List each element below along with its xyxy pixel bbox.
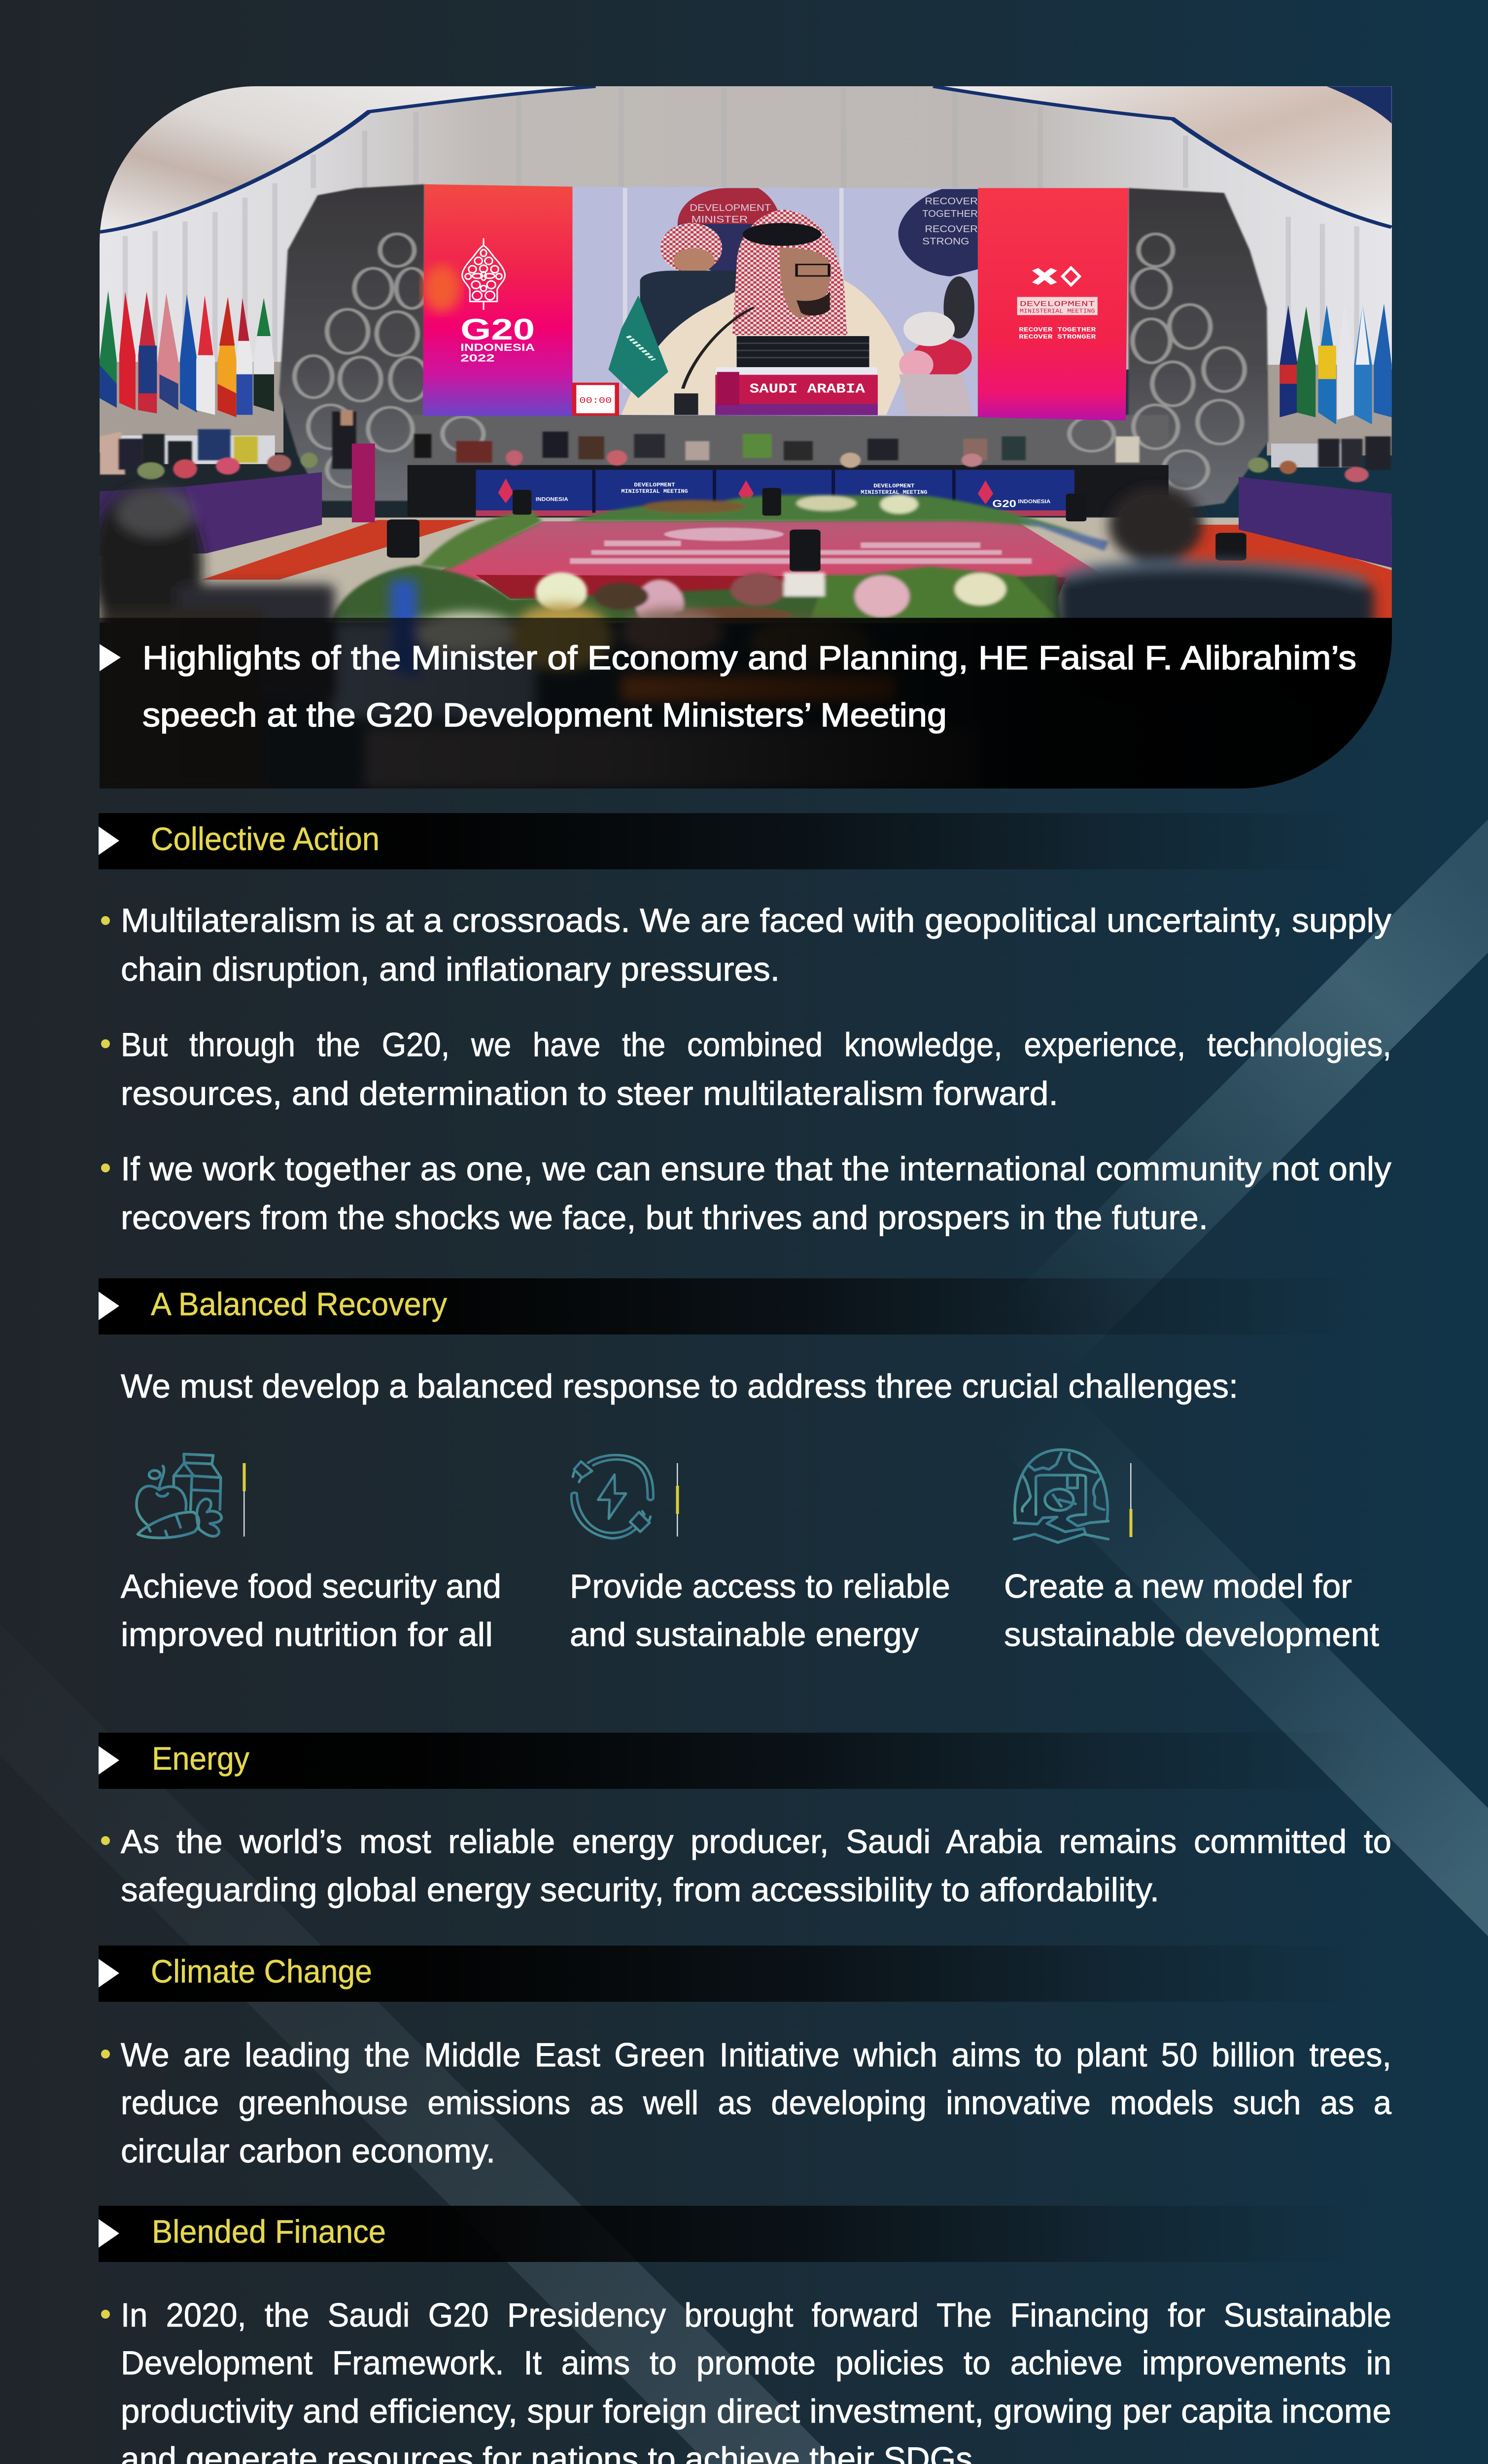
caption arrow <box>100 644 121 671</box>
section heading: A Balanced Recovery <box>99 1278 1370 1335</box>
timer <box>574 384 617 414</box>
blurred foreground heads and chairs <box>91 486 1374 790</box>
section heading: Blended Finance <box>99 2206 1370 2262</box>
text block: Climate Change: circular carbon economy. <box>121 2132 495 2170</box>
G20 logo on screen left: INDONESIA <box>460 342 535 353</box>
central stage with logo <box>442 520 1110 599</box>
caption: energy access: and sustainable energy <box>570 1616 919 1653</box>
caption: food security <box>121 1568 501 1653</box>
screen backdrop text <box>690 196 978 246</box>
conference tables <box>100 444 1392 568</box>
text block: Climate Change: reduce greenhouse emissions as well as developing innovative models such as a <box>121 2084 1391 2122</box>
caption: energy access <box>570 1568 950 1653</box>
text block: Collective Action bullets: Multilateralism is at a crossroads. We are faced with geopolitical uncertainty, supply <box>121 902 1391 939</box>
flags right <box>1280 304 1392 424</box>
table signage: DEVELOPMENT <box>873 483 915 489</box>
table flowers on screen <box>899 276 974 415</box>
text block: Climate Change: We are leading the Middle East Green Initiative which aims to plant 50 billion trees, <box>121 2036 1391 2074</box>
minister on screen <box>621 209 908 415</box>
decorative chevron bottom left <box>0 1624 890 2464</box>
text block: Blended Finance: productivity and efficiency, spur foreign direct investment, growing per capita income <box>121 2393 1391 2430</box>
table signage: INDONESIA <box>536 496 568 502</box>
section heading: Energy <box>99 1733 1370 1789</box>
foreground foliage and flowers <box>330 565 1062 627</box>
section heading: Collective Action: Collective Action <box>151 821 380 857</box>
caption: new model: sustainable development <box>1004 1616 1379 1653</box>
G20 logo on screen left <box>460 238 535 364</box>
text block: Blended Finance <box>101 2296 1391 2464</box>
G20 logo on screen left: 2022 <box>460 352 495 364</box>
caption: food security: Achieve food security and <box>121 1568 501 1605</box>
section heading: Climate Change: Climate Change <box>151 1953 372 1989</box>
text block: Blended Finance: In 2020, the Saudi G20 Presidency brought forward The Financing for Sustainable <box>121 2296 1391 2334</box>
caption: new model: Create a new model for <box>1004 1568 1352 1605</box>
decorative chevron top right <box>930 820 1488 1936</box>
hero photo of the meeting hall <box>91 83 1399 790</box>
table signage: DEVELOPMENT <box>634 482 675 488</box>
seated delegates <box>100 410 1391 475</box>
screen backdrop text: STRONG <box>922 236 969 246</box>
floor and red carpet <box>100 517 1392 622</box>
backdrop plants behind stage <box>420 495 1108 569</box>
text block: Collective Action bullets: chain disruption, and inflationary pressures. <box>121 951 780 988</box>
text block: Climate Change <box>101 2036 1391 2170</box>
table signage: INDONESIA <box>1018 499 1050 505</box>
cameras <box>387 488 1246 572</box>
text block: Collective Action bullets: If we work together as one, we can ensure that the international community not only <box>121 1150 1391 1188</box>
table signage <box>498 479 1050 510</box>
hall wall and curtains <box>91 83 1399 467</box>
section heading: Climate Change <box>99 1946 1370 2002</box>
text block: Energy <box>101 1823 1391 1909</box>
divider: icon three <box>1130 1463 1133 1537</box>
carved stones <box>279 184 1269 511</box>
right panel branding on screen: MINISTERIAL MEETING <box>1020 308 1095 315</box>
hero caption text <box>142 639 1356 734</box>
hero caption text: Highlights of the Minister of Economy and Planning, HE Faisal F. Alibrahim’s <box>142 639 1356 677</box>
icon: sustainable development globe <box>1014 1450 1108 1542</box>
right panel branding on screen: RECOVER TOGETHER <box>1019 327 1096 333</box>
section heading: Blended Finance: Blended Finance <box>152 2213 386 2250</box>
table signage: MINISTERIAL MEETING <box>861 489 928 495</box>
screen backdrop text: DEVELOPMENT <box>690 203 771 213</box>
icon: food security <box>137 1454 221 1538</box>
podium and name plate: SAUDI ARABIA <box>750 381 865 397</box>
ceiling drapes <box>100 86 1392 232</box>
text block: Collective Action bullets: resources, and determination to steer multilateralism forward. <box>121 1075 1058 1112</box>
blurred lower foreground <box>330 580 980 788</box>
icon: reliable energy <box>571 1455 654 1539</box>
screen backdrop text: MINISTER <box>692 214 748 225</box>
podium and name plate <box>715 336 878 415</box>
divider: icon two <box>676 1463 679 1537</box>
section heading: Collective Action <box>99 813 1370 869</box>
divider: icon one <box>242 1463 245 1537</box>
text block: Collective Action bullets: But through the G20, we have the combined knowledge, experience, technologies, <box>121 1026 1391 1063</box>
screen backdrop text: TOGETHER <box>922 208 978 219</box>
table signage: G20 <box>992 498 1016 510</box>
screen backdrop text: RECOVER <box>925 196 978 206</box>
text block: Energy: As the world’s most reliable energy producer, Saudi Arabia remains committed to <box>121 1823 1391 1860</box>
right panel branding on screen: DEVELOPMENT <box>1020 300 1095 308</box>
hero caption text: speech at the G20 Development Ministers’ Meeting <box>142 696 947 734</box>
caption: energy access: Provide access to reliable <box>570 1568 950 1605</box>
flags left <box>100 291 274 417</box>
delegate behind the minister <box>640 223 737 350</box>
timer: 00:00 <box>579 396 612 406</box>
text block: Energy: safeguarding global energy security, from accessibility to affordability. <box>121 1871 1159 1909</box>
text block: Blended Finance: Development Framework. It aims to promote policies to achieve improvements in <box>121 2344 1391 2382</box>
screen backdrop text: RECOVER <box>925 224 978 234</box>
caption overlay band <box>100 618 1395 790</box>
saudi flag on desk <box>608 296 754 415</box>
section heading: A Balanced Recovery: A Balanced Recovery <box>151 1286 447 1322</box>
right panel branding on screen: RECOVER STRONGER <box>1019 334 1096 341</box>
text block: Collective Action bullets <box>101 902 1391 1236</box>
table-top flowers <box>137 450 1369 482</box>
table signage: MINISTERIAL MEETING <box>621 488 688 494</box>
text block: Collective Action bullets: recovers from the shocks we face, but thrives and prospers in the future. <box>121 1199 1208 1236</box>
right panel branding on screen <box>1017 268 1098 341</box>
text block: balanced response intro: We must develop a balanced response to address three crucial challenges: <box>121 1368 1238 1405</box>
LED screen <box>423 184 1128 421</box>
section heading: Energy: Energy <box>152 1740 249 1777</box>
G20 logo on screen left: G20 <box>460 313 535 346</box>
caption: food security: improved nutrition for all <box>121 1616 493 1653</box>
caption: new model <box>1004 1568 1379 1653</box>
